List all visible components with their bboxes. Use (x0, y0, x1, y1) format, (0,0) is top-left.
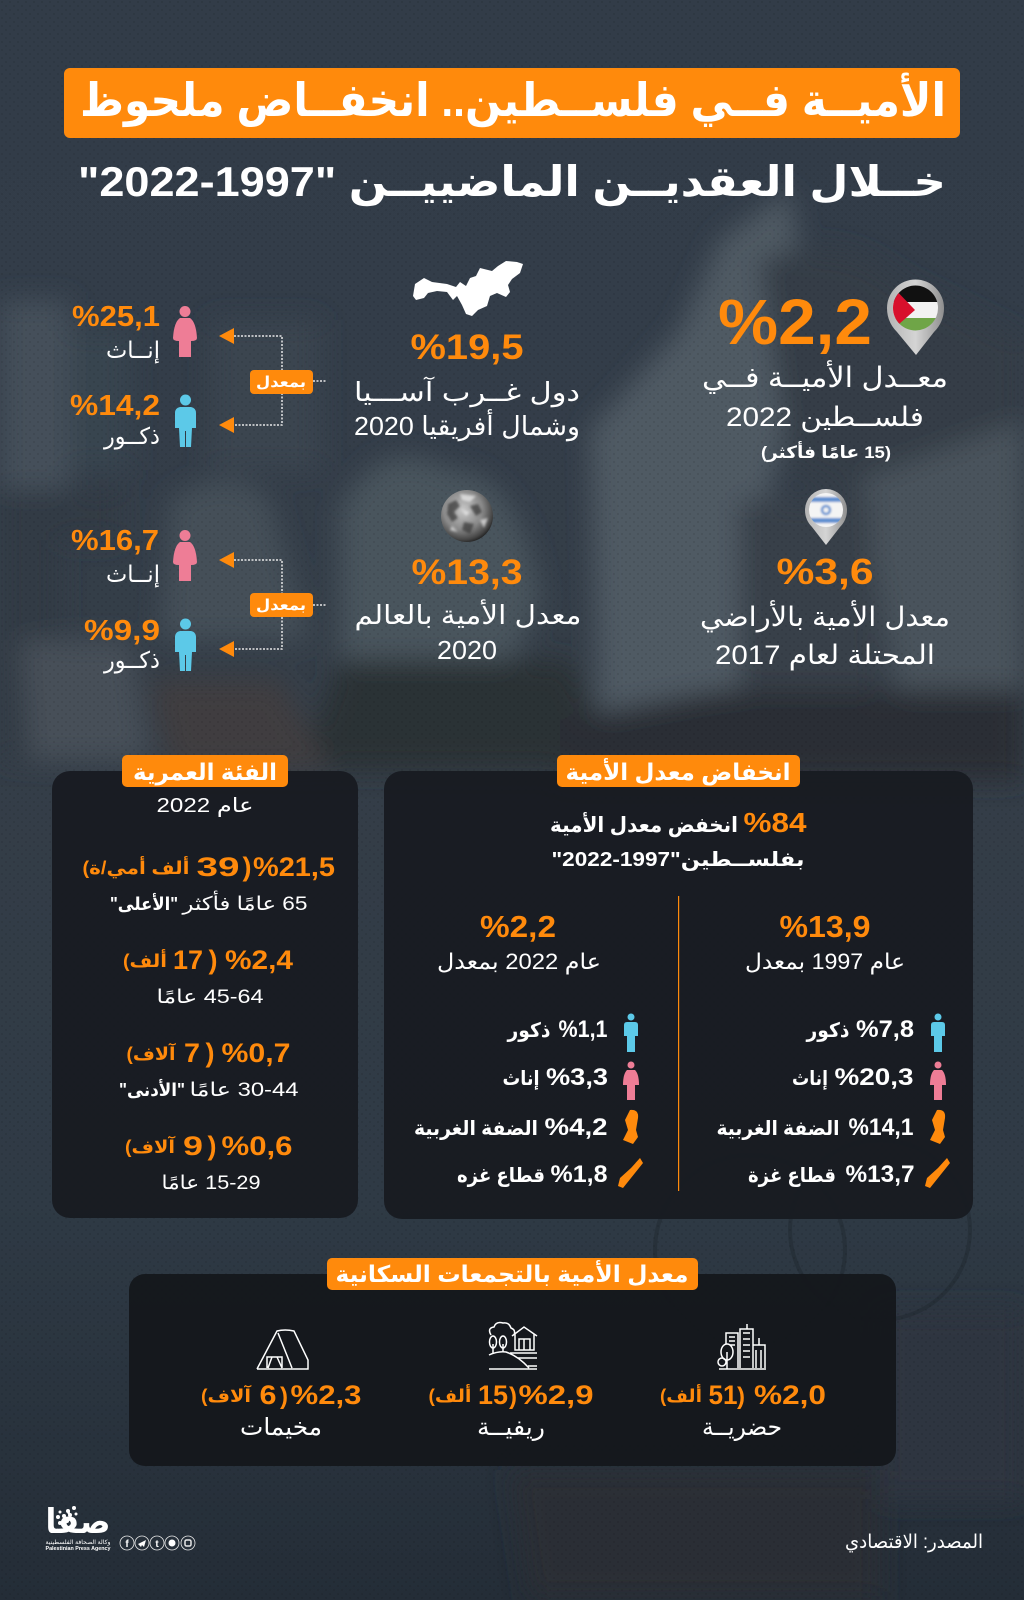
heading tag: انخفاض معدل الأمية (566, 757, 790, 786)
row: West Bank (414, 1110, 638, 1144)
rural: ألف) (428, 1384, 472, 1406)
age 45-64 (123, 945, 293, 1008)
summary text: %84 (744, 807, 807, 838)
stat: occupied territories (700, 489, 950, 670)
row: females: %3,3 (546, 1064, 608, 1091)
age 15-29 (125, 1131, 292, 1194)
stat: Palestine: (15 عامًا فأكثر) (761, 441, 891, 463)
logo: Safa agency: وكالة الصحافة الفلسطينية (46, 1539, 111, 1546)
row: Gaza: %13,7 (846, 1161, 914, 1188)
row: Gaza (457, 1158, 643, 1188)
age 45-64: 45-64 عامًا (156, 987, 264, 1008)
gender breakdown: West Asia (70, 301, 327, 450)
panel: population communities (129, 1258, 896, 1466)
stat: Palestine: فلســطين 2022 (726, 402, 924, 433)
stat: West Asia and North Africa: دول غــرب آســـيا (354, 376, 580, 408)
stat: world (354, 490, 582, 665)
age 45-64: ) (208, 945, 218, 975)
column: 1997 (716, 909, 950, 1188)
age 30-44 (119, 1038, 299, 1101)
age 15-29: ) (208, 1131, 216, 1161)
column: 2022: عام 2022 بمعدل (437, 949, 601, 974)
stat: Palestine (702, 280, 948, 463)
subtitle: خــلال العقديــن الماضييــن "1997-2022" (78, 158, 946, 207)
heading tag: معدل الأمية بالتجمعات السكانية (336, 1259, 688, 1287)
icon: city (718, 1324, 766, 1369)
stat: occupied territories: معدل الأمية بالأراضي (700, 599, 950, 633)
males figure: %9,9 (84, 615, 160, 647)
age 65+: ألف أمي/ة) (82, 856, 190, 879)
age 65+: ) (242, 852, 252, 882)
column: 1997: عام 1997 بمعدل (745, 949, 905, 974)
stat: occupied territories: %3,6 (776, 551, 874, 592)
females figure: %16,7 (71, 525, 159, 557)
age 45-64: 17 (173, 945, 203, 975)
row: males (806, 1014, 945, 1052)
urban: 51 (708, 1380, 738, 1410)
age 65+: %21,5 (253, 852, 335, 882)
icon: Israel flag pin (805, 489, 847, 545)
column: 1997: %13,9 (780, 909, 870, 944)
stat: world: معدل الأمية بالعالم (354, 598, 582, 631)
row: West Bank: الضفة الغربية (716, 1118, 840, 1140)
icon: tent (257, 1330, 308, 1369)
title banner: الأميــة فــي فلســطين.. انخفــاض ملحوظ (80, 72, 946, 127)
age 15-29: %0,6 (222, 1131, 292, 1161)
icon: male (175, 618, 196, 671)
females figure (71, 525, 197, 588)
heading tag: الفئة العمرية (133, 759, 277, 786)
urban: ألف) (660, 1384, 702, 1406)
age 45-64: ألف) (123, 949, 167, 971)
rural: %2,9 (518, 1380, 594, 1410)
urban: حضريــة (702, 1414, 782, 1441)
row: West Bank: %14,1 (848, 1114, 914, 1141)
icon: region map (413, 261, 523, 316)
age 30-44: 7 (184, 1038, 200, 1068)
badge: بمعدل (256, 374, 306, 391)
row: males: %1,1 (558, 1016, 608, 1043)
females figure: إنــاث (106, 561, 160, 588)
row: females: إناث (792, 1068, 828, 1090)
age 65+: 65 عامًا فأكثر (181, 890, 308, 915)
row: males: ذكور (507, 1020, 550, 1042)
camps: آلاف) (201, 1384, 252, 1406)
age 30-44: آلاف) (126, 1042, 176, 1064)
stat: West Asia and North Africa (354, 261, 580, 442)
source: المصدر: الاقتصادي (845, 1532, 983, 1553)
connector arrows (219, 552, 327, 657)
summary text: انخفض معدل الأمية (550, 811, 738, 837)
age 30-44: 30-44 عامًا (189, 1080, 299, 1101)
age 15-29: آلاف) (125, 1135, 176, 1157)
row: West Bank (716, 1110, 945, 1144)
age 65+: 39 (196, 852, 240, 882)
camps: مخيمات (240, 1414, 322, 1441)
urban: ) (737, 1383, 745, 1410)
summary text: بفلســطين"1997-2022" (552, 849, 804, 871)
social icons: t (155, 1539, 159, 1550)
panel: age group (52, 755, 358, 1218)
stat: West Asia and North Africa: وشمال أفريقيا 2020 (354, 408, 580, 442)
panel: age group: عام 2022 (156, 795, 254, 817)
row: females (792, 1062, 946, 1100)
badge (250, 370, 313, 394)
icon: female (173, 306, 197, 357)
age 30-44: ) (206, 1038, 214, 1068)
stat: world: %13,3 (412, 553, 522, 592)
males figure: %14,2 (70, 390, 160, 422)
camps: ) (280, 1383, 288, 1410)
females figure: %25,1 (72, 301, 160, 333)
row: West Bank: %4,2 (544, 1114, 608, 1141)
row: males: %7,8 (856, 1016, 914, 1043)
stat: Palestine: معــدل الأميــة فــي (702, 359, 948, 394)
urban (660, 1324, 826, 1441)
row: males (507, 1014, 638, 1052)
age 65+ (82, 852, 335, 915)
logo: Safa agency: Palestinian Press Agency (46, 1546, 111, 1552)
age 30-44: "الأدنى" (119, 1079, 185, 1100)
females figure (72, 301, 197, 364)
stat: Palestine: %2,2 (718, 286, 872, 358)
icon: globe (441, 490, 493, 542)
column: 2022 (414, 909, 643, 1188)
icon: house (489, 1322, 537, 1369)
row: females (502, 1062, 639, 1100)
males figure: ذكــور (103, 647, 160, 674)
row: Gaza (748, 1158, 950, 1188)
social icons: f (125, 1539, 129, 1550)
males figure (84, 615, 196, 674)
camps: 6 (260, 1380, 276, 1410)
camps: %2,3 (290, 1380, 362, 1410)
rural: ريفيــة (477, 1414, 545, 1441)
icon: male (175, 394, 196, 447)
rural (428, 1322, 594, 1441)
males figure (70, 390, 196, 450)
title banner (64, 68, 960, 138)
rural: ) (509, 1383, 517, 1410)
stat: world: 2020 (437, 635, 497, 665)
logo: Safa agency: صفا (46, 1503, 110, 1541)
gender breakdown: world (71, 525, 327, 674)
row: Gaza: قطاع غزة (748, 1165, 836, 1187)
summary text (550, 807, 807, 871)
column: 2022: %2,2 (480, 909, 556, 944)
rural: 15 (478, 1380, 508, 1410)
stat: occupied territories: المحتلة لعام 2017 (715, 640, 935, 670)
age 30-44: %0,7 (222, 1038, 290, 1068)
panel: literacy decline (384, 755, 973, 1219)
badge: بمعدل (256, 597, 306, 614)
row: Gaza: %1,8 (550, 1161, 608, 1188)
connector arrows (219, 328, 327, 433)
icon: female (173, 530, 197, 581)
social icons (120, 1536, 195, 1550)
row: Gaza: قطاع غزه (457, 1165, 545, 1187)
males figure: ذكــور (103, 423, 160, 450)
row: females: %20,3 (834, 1064, 914, 1091)
row: males: ذكور (806, 1020, 850, 1042)
row: West Bank: الضفة الغربية (414, 1118, 538, 1140)
females figure: إنــاث (106, 337, 160, 364)
urban: %2,0 (754, 1380, 826, 1410)
row: females: إناث (502, 1068, 540, 1090)
badge (250, 593, 313, 617)
age 15-29: 15-29 عامًا (162, 1173, 260, 1194)
age 45-64: %2,4 (225, 945, 293, 975)
age 15-29: 9 (183, 1131, 203, 1161)
icon: Palestine flag pin (887, 280, 944, 355)
age 65+: "الأعلى" (110, 893, 178, 914)
camps (201, 1330, 362, 1441)
stat: West Asia and North Africa: %19,5 (410, 328, 524, 367)
